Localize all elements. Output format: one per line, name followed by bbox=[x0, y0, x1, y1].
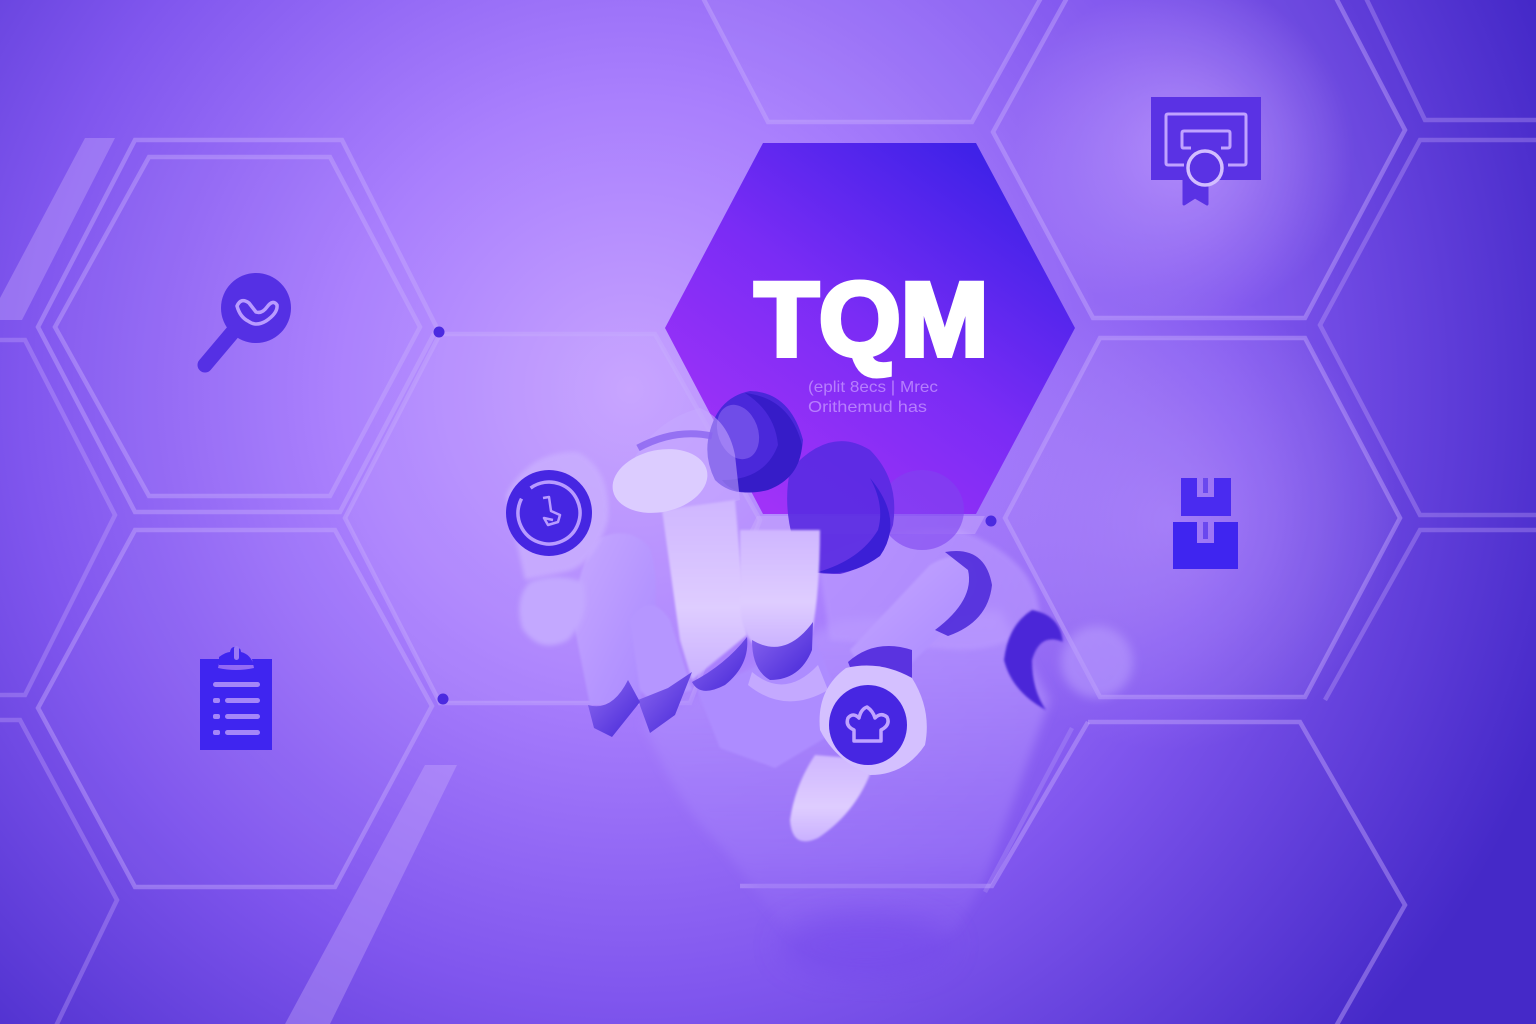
icon: stacked boxes bbox=[1173, 478, 1238, 569]
outer knuckle bbox=[588, 680, 640, 737]
robot hand bbox=[506, 391, 1133, 841]
finger: long middle bbox=[662, 500, 747, 680]
far-right finger tip bbox=[1061, 626, 1133, 698]
small thumb left bbox=[519, 577, 585, 645]
robot hand behind the hexagon bbox=[643, 529, 1050, 977]
hexagon: centre-left cell bbox=[345, 334, 760, 703]
band under hexagon bbox=[748, 516, 985, 534]
hexagon: boxes cell bbox=[1005, 338, 1400, 697]
decorative diagonal bars bbox=[0, 138, 457, 1024]
wrist bbox=[643, 610, 1050, 959]
index tip bbox=[607, 441, 713, 521]
palm rim bbox=[748, 665, 828, 701]
icon: clock button bbox=[506, 470, 592, 556]
middle knuckle bbox=[692, 637, 747, 691]
palm bbox=[697, 640, 840, 768]
thumb collar bbox=[848, 646, 912, 680]
clock button pad bbox=[506, 452, 608, 580]
icon: clipboard checklist bbox=[200, 646, 272, 750]
right thumb arm bbox=[850, 557, 977, 670]
finger: second bbox=[630, 605, 692, 700]
subtitle: (eplit 8ecs | Mrec bbox=[808, 379, 938, 396]
second knuckle bbox=[638, 672, 692, 733]
subtitle bbox=[808, 379, 938, 416]
hexagon: lower right cell bbox=[740, 722, 1405, 1024]
icon: magnifier with check bbox=[205, 273, 291, 365]
right thumb ring bbox=[935, 551, 992, 636]
lower thumb bbox=[790, 755, 875, 841]
hood ring bbox=[638, 434, 712, 448]
wrist shadow bbox=[781, 913, 951, 977]
hexagon: clipboard cell bbox=[38, 530, 432, 887]
rear purple knuckle bbox=[880, 470, 964, 550]
index joint highlight bbox=[710, 399, 766, 465]
dark knuckles bbox=[588, 622, 813, 737]
hexagon: certificate cell bbox=[993, 0, 1405, 318]
finger: far left lower bbox=[573, 533, 656, 705]
rear joint crescent bbox=[818, 478, 890, 573]
hexagon: top cell bbox=[702, 0, 1042, 122]
subtitle: Orithemud has bbox=[808, 399, 927, 416]
finger: long front bbox=[740, 530, 820, 650]
connector dots bbox=[434, 326, 996, 704]
title: TQM bbox=[754, 262, 988, 378]
hexagon: magnifier cell bbox=[38, 140, 437, 512]
upper knuckle halo bbox=[818, 529, 1040, 650]
rear dark joint bbox=[787, 441, 894, 574]
translucent hood above index tip bbox=[632, 408, 740, 515]
central TQM hexagon bbox=[665, 143, 1075, 514]
crown button pad bbox=[820, 666, 927, 775]
index joint shading bbox=[722, 393, 802, 492]
icon: crown button bbox=[829, 685, 907, 765]
far-right finger joint bbox=[1004, 610, 1063, 710]
front knuckle bbox=[752, 622, 813, 680]
icon: certificate bbox=[1151, 97, 1261, 204]
dark index joint bbox=[707, 391, 803, 492]
